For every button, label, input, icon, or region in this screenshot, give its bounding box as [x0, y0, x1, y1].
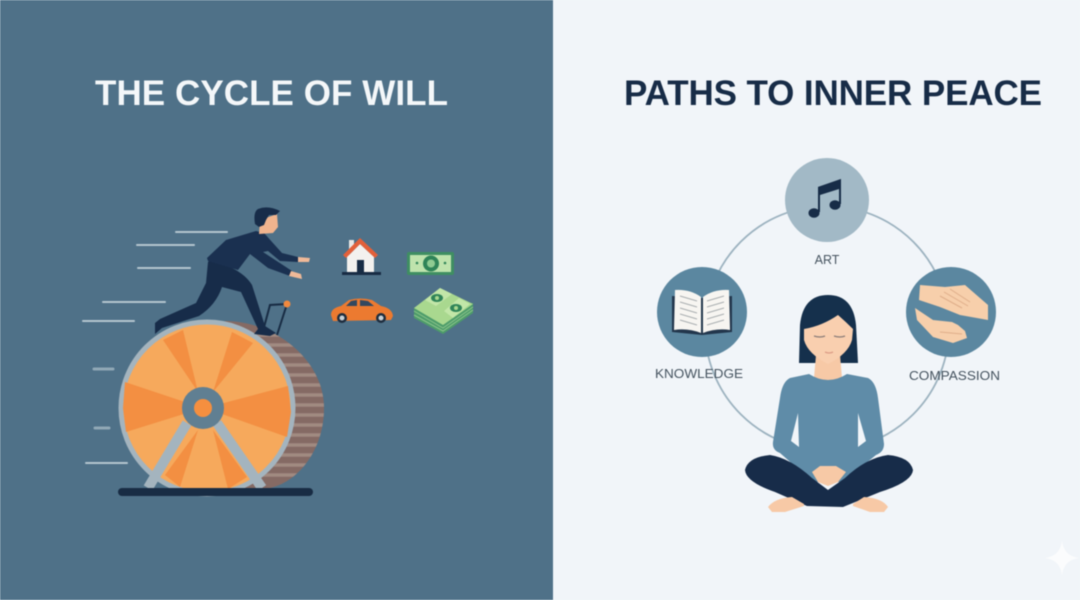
label: knowledge: KNOWLEDGE: [655, 367, 743, 381]
wheel back rim: [225, 320, 324, 488]
meditating woman: [745, 295, 913, 512]
legs: [745, 455, 913, 507]
feet: [768, 497, 888, 512]
title: the cycle of will: THE CYCLE OF WILL: [95, 74, 448, 113]
icon: money stack: [414, 288, 473, 334]
head: [254, 207, 280, 234]
face: [804, 315, 853, 364]
torso and arms: [207, 231, 298, 276]
speed lines: [83, 232, 227, 463]
hair: [799, 295, 858, 363]
icon: hands: [915, 285, 988, 343]
label: art: ART: [815, 253, 840, 267]
hamster wheel: [118, 300, 330, 496]
sparkle watermark: [1045, 541, 1079, 575]
wheel stand: [148, 423, 262, 488]
node: knowledge: [655, 267, 747, 381]
wheel face: [121, 322, 293, 494]
icon: house: [342, 238, 381, 275]
label: compassion: COMPASSION: [909, 369, 1000, 383]
node: art: [785, 158, 869, 267]
neck: [814, 355, 842, 384]
title: paths to inner peace: PATHS TO INNER PEACE: [624, 74, 1042, 113]
icon: open book: [672, 290, 732, 335]
connecting ring: [705, 206, 949, 450]
running man: [155, 207, 310, 336]
legs: [155, 258, 276, 336]
wheel handle: [263, 300, 290, 335]
sweater: [773, 374, 884, 482]
icon: dollar bill: [407, 252, 454, 275]
wheel hub: [182, 387, 224, 429]
arm gaps: [791, 413, 866, 447]
closed eyes: [814, 336, 845, 353]
panel: paths to inner peace: [553, 0, 1080, 600]
panel: the cycle of will: [0, 0, 553, 600]
base: [118, 488, 313, 496]
icon: music note: [808, 179, 841, 218]
hands: [289, 257, 310, 279]
wheel spokes: [123, 330, 291, 489]
hands: [812, 466, 846, 486]
icon: car: [331, 298, 393, 323]
node: compassion: [906, 267, 1000, 383]
